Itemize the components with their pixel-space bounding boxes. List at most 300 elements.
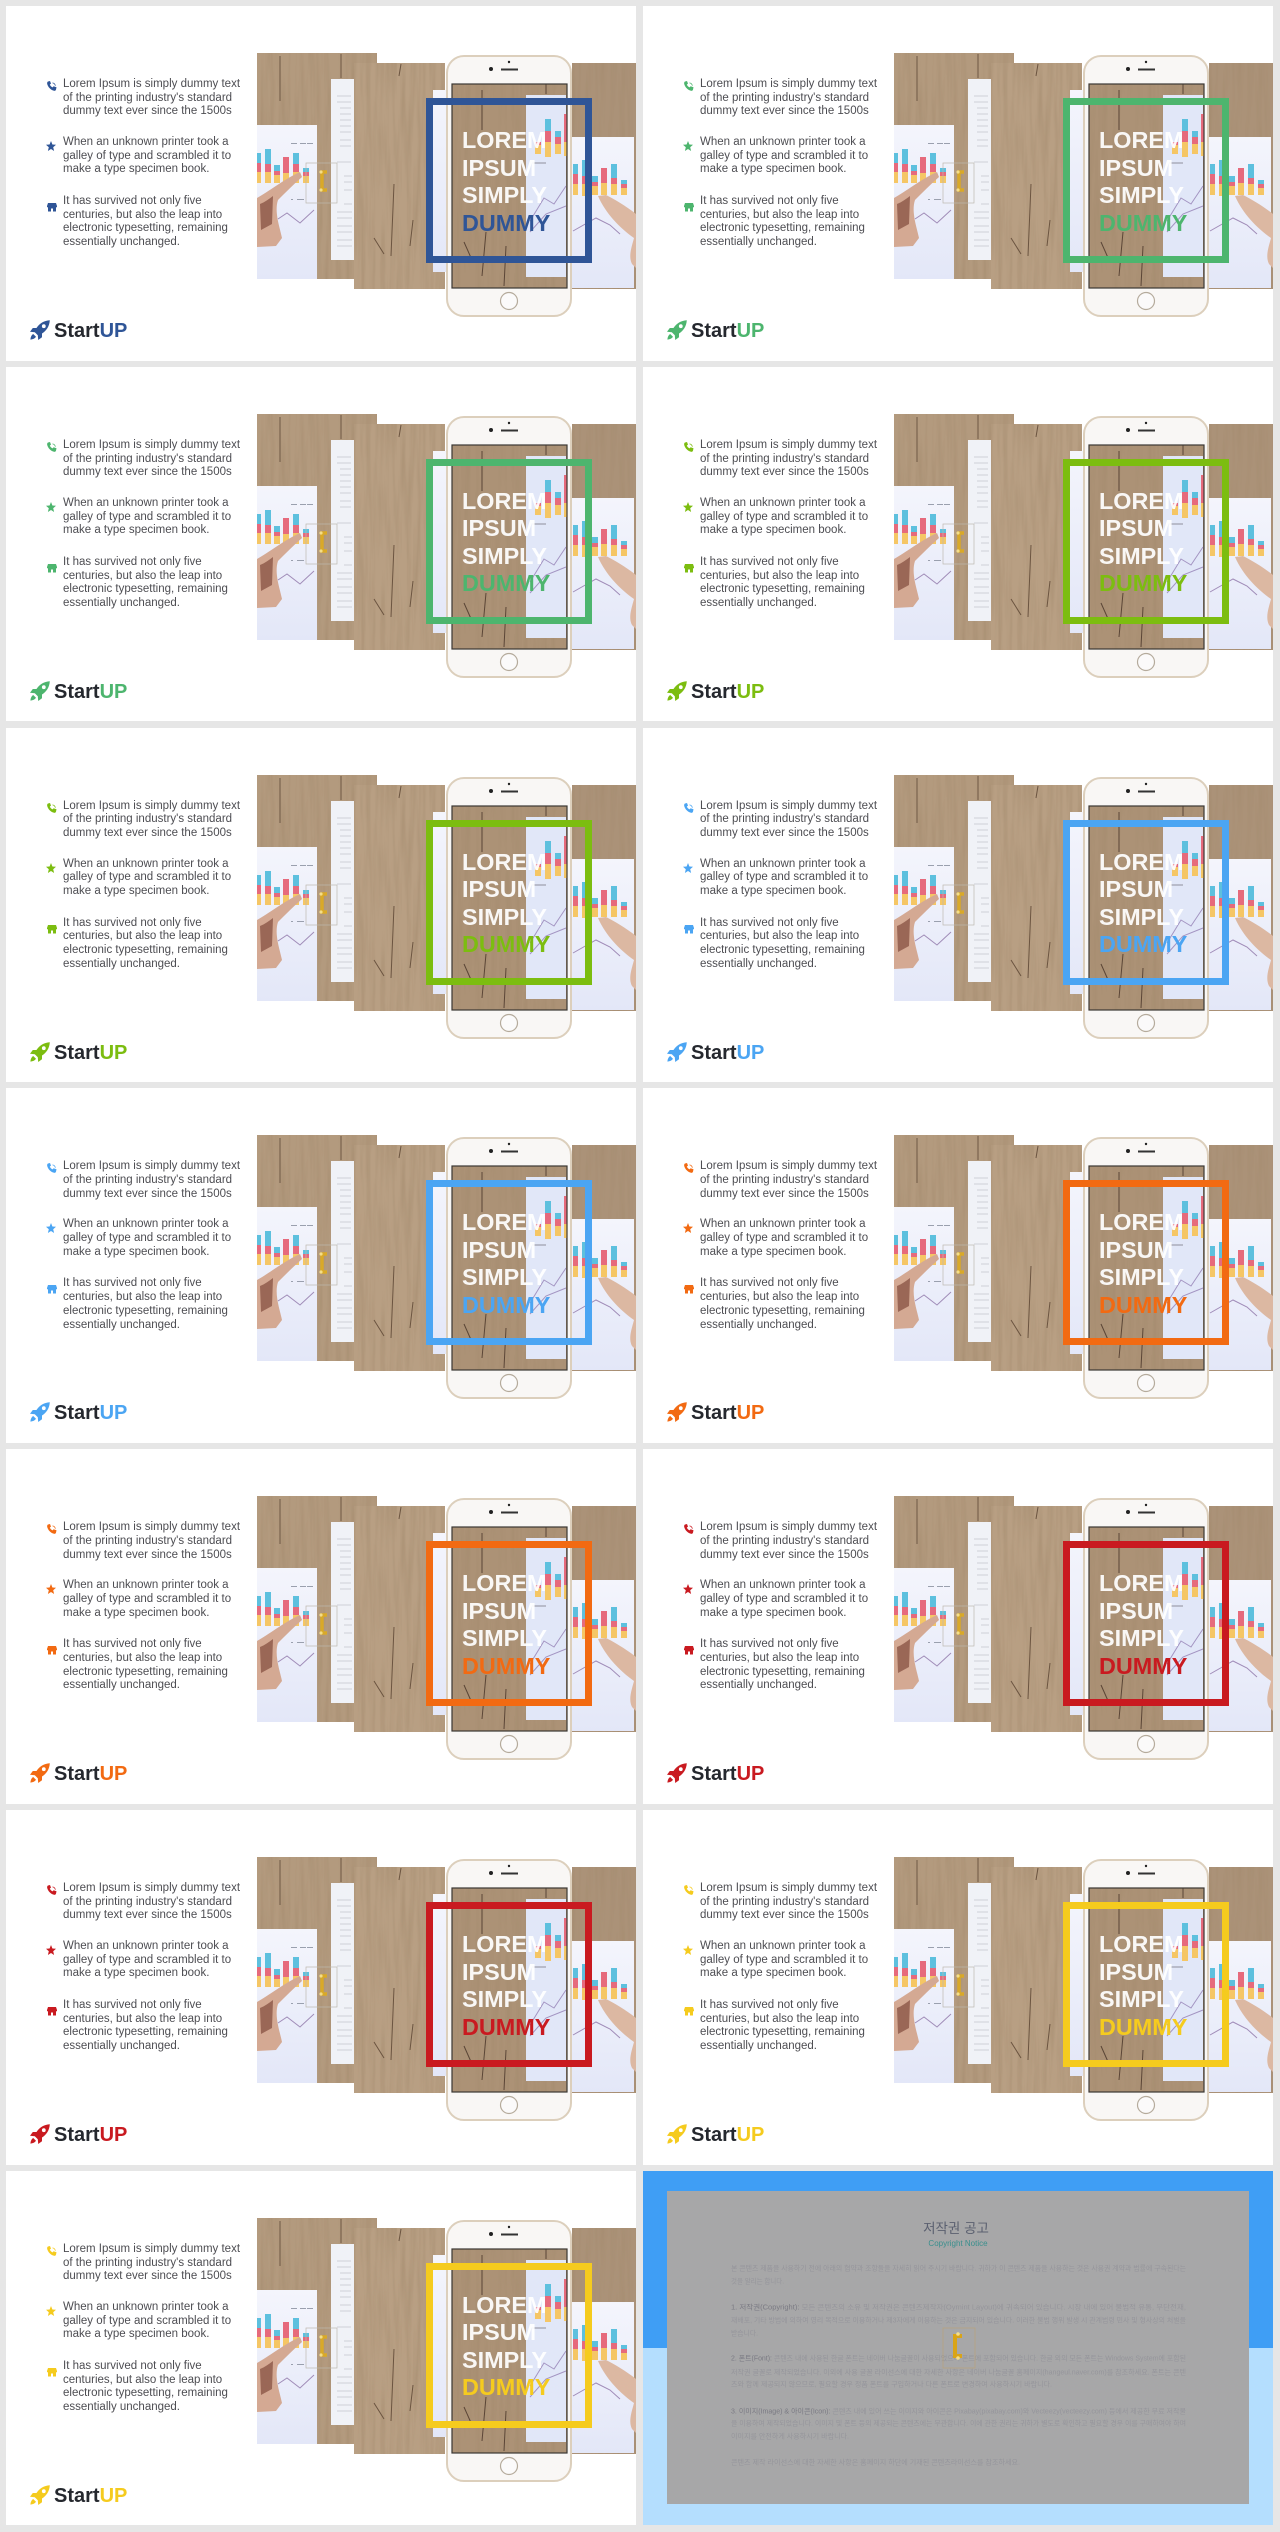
text block 3: electronic typesetting, remaining bbox=[63, 583, 228, 595]
coloured frame bbox=[1063, 459, 1229, 624]
headline: DUMMY bbox=[462, 1653, 550, 1679]
slide 6: sky blue bbox=[643, 728, 1273, 1082]
photo collage with phone bbox=[6, 1088, 636, 1442]
icon: store bbox=[684, 924, 694, 934]
headline: DUMMY bbox=[462, 1292, 550, 1318]
text block 3: electronic typesetting, remaining bbox=[700, 1305, 865, 1317]
text block 2 bbox=[63, 2301, 231, 2342]
notice body text bbox=[731, 2264, 1187, 2466]
icon: star bbox=[683, 502, 693, 512]
text block 2: make a type specimen book. bbox=[63, 1607, 209, 1619]
text block 3: centuries, but also the leap into bbox=[63, 2013, 222, 2025]
text block 1 bbox=[63, 78, 240, 117]
text block 3: It has survived not only five bbox=[63, 195, 202, 207]
icon: store bbox=[47, 1284, 57, 1294]
logo: StartUP: StartUP bbox=[691, 2124, 764, 2146]
photo collage with phone bbox=[6, 1810, 636, 2164]
headline: SIMPLY bbox=[1099, 1986, 1184, 2012]
text block 1: dummy text ever since the 1500s bbox=[63, 2270, 232, 2282]
watermark: gold C bbox=[943, 2328, 975, 2368]
text block 1: dummy text ever since the 1500s bbox=[700, 466, 869, 478]
text block 3: centuries, but also the leap into bbox=[63, 2374, 222, 2386]
logo: StartUP: StartUP bbox=[54, 2124, 127, 2146]
text block 1 bbox=[63, 439, 240, 478]
text block 1: Lorem Ipsum is simply dummy text bbox=[63, 2243, 240, 2255]
text block 2: galley of type and scrambled it to bbox=[700, 1954, 868, 1966]
text block 2: galley of type and scrambled it to bbox=[63, 871, 231, 883]
slide 4: lime bbox=[643, 367, 1273, 721]
headline: SIMPLY bbox=[1099, 182, 1184, 208]
icon: star bbox=[46, 1223, 56, 1233]
notice body text: 본 콘텐츠 제품을 사용하기 전에 아래의 협약과 조항들을 자세히 읽어 주시기 바랍니다. 귀하가 이 콘텐츠 제품을 사용하는 것은 사용권 계약과 법률에 구속된다는 bbox=[731, 2264, 1187, 2272]
headline: SIMPLY bbox=[462, 1264, 547, 1290]
text block 1: of the printing industry's standard bbox=[63, 1535, 232, 1547]
text block 1: Lorem Ipsum is simply dummy text bbox=[700, 78, 877, 90]
icon: phone bbox=[684, 803, 694, 813]
headline: SIMPLY bbox=[462, 2347, 547, 2373]
text block 2: When an unknown printer took a bbox=[63, 1940, 229, 1952]
notice body text: 3. 이미지(Image) & 아이콘(Icon): 콘텐츠 내에 있어 쓰는 이미지와 아이콘은 Pixabay(pixabay.com)와 Vecteezy(vecteezy.com) 등에서 제공한 무료 저작물 bbox=[731, 2406, 1187, 2416]
photo collage with phone bbox=[257, 414, 636, 678]
logo: StartUP: StartUP bbox=[691, 681, 764, 703]
text block 1: of the printing industry's standard bbox=[700, 813, 869, 825]
text block 2: make a type specimen book. bbox=[700, 1246, 846, 1258]
headline bbox=[1099, 1209, 1187, 1319]
text block 3 bbox=[700, 195, 865, 248]
text block 3 bbox=[63, 917, 228, 971]
headline: LOREM bbox=[462, 488, 546, 514]
headline: DUMMY bbox=[1099, 1292, 1187, 1318]
icon: star bbox=[683, 1584, 693, 1594]
text block 3 bbox=[63, 2360, 228, 2415]
text block 2 bbox=[63, 858, 231, 899]
headline: SIMPLY bbox=[1099, 543, 1184, 569]
icon: store bbox=[684, 2006, 694, 2016]
headline: IPSUM bbox=[462, 154, 536, 180]
headline bbox=[462, 127, 550, 236]
text block 3 bbox=[700, 1277, 865, 1332]
background band: light blue bbox=[643, 2348, 1273, 2525]
slide 5: lime bbox=[6, 728, 636, 1082]
text block 3: centuries, but also the leap into bbox=[63, 1291, 222, 1303]
text block 2: make a type specimen book. bbox=[63, 1246, 209, 1258]
icon: star bbox=[46, 141, 56, 151]
text block 1: Lorem Ipsum is simply dummy text bbox=[700, 439, 877, 451]
headline: IPSUM bbox=[1099, 1598, 1173, 1624]
text block 1 bbox=[700, 439, 877, 478]
text block 1: dummy text ever since the 1500s bbox=[63, 1549, 232, 1561]
text block 2: When an unknown printer took a bbox=[700, 497, 866, 509]
text block 3: centuries, but also the leap into bbox=[700, 209, 859, 221]
headline: LOREM bbox=[1099, 1570, 1183, 1596]
notice body text: 것을 알리는 합니다. bbox=[731, 2276, 784, 2286]
headline: LOREM bbox=[462, 1570, 546, 1596]
text block 3: centuries, but also the leap into bbox=[63, 930, 222, 942]
text block 2: galley of type and scrambled it to bbox=[700, 150, 868, 162]
text block 3: essentially unchanged. bbox=[63, 958, 180, 970]
text block 1: Lorem Ipsum is simply dummy text bbox=[63, 1882, 240, 1894]
headline: SIMPLY bbox=[462, 1625, 547, 1651]
text block 2: galley of type and scrambled it to bbox=[700, 871, 868, 883]
icon: star bbox=[683, 1945, 693, 1955]
headline: DUMMY bbox=[1099, 570, 1187, 596]
headline: DUMMY bbox=[1099, 2014, 1187, 2040]
text block 3: essentially unchanged. bbox=[63, 236, 180, 248]
icon: store bbox=[684, 203, 694, 212]
text block 2 bbox=[63, 1579, 231, 1620]
photo collage with phone bbox=[6, 2171, 636, 2525]
text block 3: It has survived not only five bbox=[63, 1999, 202, 2011]
text block 3: essentially unchanged. bbox=[63, 1679, 180, 1691]
headline: SIMPLY bbox=[462, 904, 547, 930]
text block 3 bbox=[700, 917, 865, 971]
slide 1: navy bbox=[6, 6, 636, 360]
icon: store bbox=[47, 2006, 57, 2016]
text block 3 bbox=[700, 1638, 865, 1693]
text block 3: centuries, but also the leap into bbox=[700, 570, 859, 582]
icon: store bbox=[684, 1645, 694, 1655]
text block 1 bbox=[63, 1160, 240, 1202]
text block 1 bbox=[700, 1882, 877, 1923]
text block 3: essentially unchanged. bbox=[700, 1318, 817, 1330]
headline bbox=[1099, 488, 1187, 596]
text block 3: electronic typesetting, remaining bbox=[700, 583, 865, 595]
notice body text: 을 이용하여 제작되었습니다. 이미지 및 폰트 등의 제공되는 콘텐츠에는 무관합니다. 이에 관한 권리는 귀하가 별도로 확인하고 필요할 경우 이를 구매하여야 하며 bbox=[731, 2418, 1186, 2428]
text block 1 bbox=[63, 1882, 240, 1923]
text block 2: When an unknown printer took a bbox=[700, 1940, 866, 1952]
icon: phone bbox=[47, 1163, 57, 1173]
text block 3 bbox=[63, 1277, 228, 1332]
text block 2: make a type specimen book. bbox=[700, 885, 846, 897]
headline: LOREM bbox=[462, 1931, 546, 1957]
text block 1: dummy text ever since the 1500s bbox=[63, 827, 232, 839]
text block 1: dummy text ever since the 1500s bbox=[63, 1909, 232, 1921]
text block 2: When an unknown printer took a bbox=[63, 497, 229, 509]
headline: DUMMY bbox=[462, 210, 550, 236]
headline: DUMMY bbox=[1099, 210, 1187, 236]
text block 1: Lorem Ipsum is simply dummy text bbox=[63, 1160, 240, 1172]
headline: IPSUM bbox=[462, 876, 536, 902]
coloured frame bbox=[1063, 1180, 1229, 1345]
text block 3: essentially unchanged. bbox=[63, 1318, 180, 1330]
headline: SIMPLY bbox=[1099, 1625, 1184, 1651]
notice body text: 콘텐츠 제작 라이선스에 대한 자세한 사항은 홈페이지 하단에 기재된 콘텐츠라이선스를 참조하세요. bbox=[731, 2458, 1020, 2466]
icon: star bbox=[683, 1223, 693, 1233]
text block 2: galley of type and scrambled it to bbox=[63, 1593, 231, 1605]
text block 3: It has survived not only five bbox=[700, 1638, 839, 1650]
text block 3: It has survived not only five bbox=[700, 556, 839, 568]
text block 3: It has survived not only five bbox=[63, 556, 202, 568]
text block 2 bbox=[63, 497, 231, 536]
text block 2 bbox=[700, 1940, 868, 1981]
text block 3: essentially unchanged. bbox=[700, 597, 817, 609]
text block 3: electronic typesetting, remaining bbox=[63, 2026, 228, 2038]
headline bbox=[462, 488, 550, 596]
slide 7: sky blue bbox=[6, 1088, 636, 1443]
background band: blue bbox=[643, 2171, 1273, 2348]
text block 2: galley of type and scrambled it to bbox=[63, 1232, 231, 1244]
icon: store bbox=[47, 203, 57, 212]
icon: phone bbox=[684, 1885, 694, 1895]
headline: IPSUM bbox=[462, 1237, 536, 1263]
text block 3: electronic typesetting, remaining bbox=[700, 222, 865, 234]
text block 3: It has survived not only five bbox=[700, 1277, 839, 1289]
text block 3 bbox=[63, 556, 228, 609]
text block 2: When an unknown printer took a bbox=[63, 1218, 229, 1230]
logo: StartUP: StartUP bbox=[54, 1402, 127, 1424]
icon: store bbox=[47, 924, 57, 934]
coloured frame bbox=[426, 459, 592, 624]
headline: LOREM bbox=[462, 2292, 546, 2318]
slide 14: copyright notice bbox=[643, 2171, 1273, 2525]
notice body text: 츠와 함께 제공되지 않으므로, 필요할 경우 정품 폰트를 구입하거나 다른 폰트로 변경하여 사용하시기 바랍니다. bbox=[731, 2380, 1052, 2388]
text block 2: make a type specimen book. bbox=[63, 163, 209, 175]
coloured frame bbox=[426, 2263, 592, 2428]
text block 2: make a type specimen book. bbox=[700, 163, 846, 175]
headline: DUMMY bbox=[1099, 931, 1187, 957]
text block 2: make a type specimen book. bbox=[63, 1967, 209, 1979]
text block 1: dummy text ever since the 1500s bbox=[700, 1909, 869, 1921]
headline: IPSUM bbox=[1099, 515, 1173, 541]
text block 3: It has survived not only five bbox=[63, 917, 202, 929]
photo collage with phone bbox=[643, 1088, 1273, 1442]
coloured frame bbox=[426, 98, 592, 263]
text block 2: When an unknown printer took a bbox=[63, 858, 229, 870]
text block 1 bbox=[63, 800, 240, 839]
headline: SIMPLY bbox=[462, 543, 547, 569]
text block 3: It has survived not only five bbox=[63, 1277, 202, 1289]
text block 1 bbox=[700, 78, 877, 117]
text block 2 bbox=[700, 858, 868, 899]
text block 2: make a type specimen book. bbox=[700, 524, 846, 536]
slide 11: red bbox=[6, 1810, 636, 2164]
headline bbox=[462, 849, 550, 959]
headline: DUMMY bbox=[462, 570, 550, 596]
icon: star bbox=[683, 863, 693, 873]
slide 8: orange bbox=[643, 1088, 1273, 1443]
text block 3: centuries, but also the leap into bbox=[63, 1652, 222, 1664]
icon: star bbox=[683, 141, 693, 151]
text block 2 bbox=[63, 1940, 231, 1981]
text block 1: dummy text ever since the 1500s bbox=[63, 466, 232, 478]
text block 2: make a type specimen book. bbox=[700, 1967, 846, 1979]
notice body text: 이미지를 안전하게 사용하시기 바랍니다. bbox=[731, 2432, 849, 2440]
text block 3 bbox=[700, 1999, 865, 2054]
text block 3: It has survived not only five bbox=[700, 195, 839, 207]
coloured frame bbox=[1063, 820, 1229, 985]
text block 2: galley of type and scrambled it to bbox=[700, 510, 868, 522]
headline: IPSUM bbox=[1099, 1958, 1173, 1984]
text block 3: centuries, but also the leap into bbox=[63, 570, 222, 582]
text block 2: galley of type and scrambled it to bbox=[63, 1954, 231, 1966]
text block 2 bbox=[700, 1579, 868, 1620]
coloured frame bbox=[426, 820, 592, 985]
notice body text: 저작권 글꼴로 제작되었습니다. 이외에 사용 글꼴 라이선스에 대한 자세한 사항은 네이버 나눔글꼴 홈페이지(hangeul.naver.com)를 참조하세요. 폰트는 콘텐 bbox=[731, 2368, 1186, 2376]
notice body text: 재배포, 기타 방법에 의하여 영리 목적으로 이용하거나 제3자에게 이용하는 것은 금지되어 있습니다. 이러한 불법 행위 발생 시 관계법령 민사 및 형사상의 처벌을 bbox=[731, 2316, 1187, 2324]
headline: LOREM bbox=[1099, 1209, 1183, 1235]
text block 3: electronic typesetting, remaining bbox=[63, 944, 228, 956]
text block 3: essentially unchanged. bbox=[700, 1679, 817, 1691]
text block 1: dummy text ever since the 1500s bbox=[63, 105, 232, 117]
text block 3: It has survived not only five bbox=[700, 917, 839, 929]
text block 3: It has survived not only five bbox=[63, 2360, 202, 2372]
logo: StartUP: StartUP bbox=[54, 2485, 127, 2507]
icon: star bbox=[46, 502, 56, 512]
logo: StartUP: StartUP bbox=[691, 1402, 764, 1424]
text block 3: essentially unchanged. bbox=[63, 2040, 180, 2052]
headline: IPSUM bbox=[462, 515, 536, 541]
coloured frame bbox=[426, 1180, 592, 1345]
coloured frame bbox=[1063, 1902, 1229, 2067]
coloured frame bbox=[1063, 98, 1229, 263]
headline: DUMMY bbox=[1099, 1653, 1187, 1679]
text block 3: essentially unchanged. bbox=[63, 2401, 180, 2413]
headline: SIMPLY bbox=[462, 1986, 547, 2012]
text block 3: centuries, but also the leap into bbox=[63, 209, 222, 221]
notice body text: 받습니다. bbox=[731, 2328, 758, 2338]
text block 1: Lorem Ipsum is simply dummy text bbox=[700, 1521, 877, 1533]
text block 3: It has survived not only five bbox=[63, 1638, 202, 1650]
slide 13: yellow bbox=[6, 2171, 636, 2525]
text block 2 bbox=[700, 497, 868, 536]
icon: star bbox=[46, 1945, 56, 1955]
icon: star bbox=[46, 863, 56, 873]
notice subtitle: Copyright Notice bbox=[928, 2239, 988, 2248]
slide 10: red bbox=[643, 1449, 1273, 1804]
text block 3 bbox=[63, 1999, 228, 2054]
text block 3: It has survived not only five bbox=[700, 1999, 839, 2011]
photo collage with phone bbox=[643, 1449, 1273, 1803]
text block 2: galley of type and scrambled it to bbox=[700, 1593, 868, 1605]
headline: DUMMY bbox=[462, 2374, 550, 2400]
headline bbox=[462, 1570, 550, 1680]
text block 2: make a type specimen book. bbox=[63, 885, 209, 897]
notice body text: 2. 폰트(Font): 콘텐츠 내에 사용된 한글 폰트는 네이버 나눔글꼴이 사용되었으며 폰트에 포함되어 있습니다. 한글 외의 모든 폰트는 Windows System에 포함된 bbox=[731, 2354, 1186, 2362]
slide 9: orange bbox=[6, 1449, 636, 1804]
text block 1: dummy text ever since the 1500s bbox=[700, 827, 869, 839]
photo collage with phone bbox=[643, 728, 1273, 1082]
headline: SIMPLY bbox=[1099, 1264, 1184, 1290]
headline: IPSUM bbox=[462, 1958, 536, 1984]
icon: phone bbox=[684, 1163, 694, 1173]
text block 3 bbox=[63, 1638, 228, 1693]
text block 3: electronic typesetting, remaining bbox=[700, 944, 865, 956]
text block 1: of the printing industry's standard bbox=[63, 92, 232, 104]
headline: IPSUM bbox=[462, 1598, 536, 1624]
icon: store bbox=[47, 1645, 57, 1655]
icon: store bbox=[47, 2367, 57, 2377]
text block 3: electronic typesetting, remaining bbox=[63, 1305, 228, 1317]
text block 1: Lorem Ipsum is simply dummy text bbox=[700, 800, 877, 812]
text block 3: centuries, but also the leap into bbox=[700, 930, 859, 942]
text block 1: dummy text ever since the 1500s bbox=[63, 1188, 232, 1200]
slide 2: green bbox=[643, 6, 1273, 360]
photo collage with phone bbox=[894, 53, 1273, 317]
text block 3: electronic typesetting, remaining bbox=[63, 1666, 228, 1678]
headline: DUMMY bbox=[462, 2014, 550, 2040]
text block 2: make a type specimen book. bbox=[63, 524, 209, 536]
icon: store bbox=[684, 1284, 694, 1294]
grey notice panel bbox=[667, 2191, 1249, 2504]
photo collage with phone bbox=[894, 414, 1273, 678]
headline bbox=[1099, 849, 1187, 959]
headline bbox=[462, 1209, 550, 1319]
text block 3: essentially unchanged. bbox=[700, 2040, 817, 2052]
text block 3: electronic typesetting, remaining bbox=[63, 222, 228, 234]
headline: LOREM bbox=[462, 127, 546, 153]
headline bbox=[1099, 127, 1187, 236]
headline: LOREM bbox=[1099, 127, 1183, 153]
text block 2: galley of type and scrambled it to bbox=[63, 150, 231, 162]
headline: IPSUM bbox=[1099, 1237, 1173, 1263]
icon: phone bbox=[684, 442, 694, 452]
headline bbox=[462, 2292, 550, 2402]
text block 2: make a type specimen book. bbox=[63, 2328, 209, 2340]
logo: StartUP: StartUP bbox=[54, 320, 127, 342]
icon: phone bbox=[47, 1524, 57, 1534]
text block 1: dummy text ever since the 1500s bbox=[700, 105, 869, 117]
coloured frame bbox=[426, 1902, 592, 2067]
logo: StartUP: StartUP bbox=[54, 1042, 127, 1064]
text block 3: electronic typesetting, remaining bbox=[700, 2026, 865, 2038]
headline: LOREM bbox=[1099, 849, 1183, 875]
headline: IPSUM bbox=[1099, 876, 1173, 902]
icon: store bbox=[684, 564, 694, 572]
text block 3: centuries, but also the leap into bbox=[700, 1652, 859, 1664]
text block 1: of the printing industry's standard bbox=[700, 452, 869, 464]
text block 2: When an unknown printer took a bbox=[700, 858, 866, 870]
text block 1: of the printing industry's standard bbox=[63, 1174, 232, 1186]
headline: LOREM bbox=[462, 1209, 546, 1235]
text block 1: Lorem Ipsum is simply dummy text bbox=[63, 78, 240, 90]
text block 1: Lorem Ipsum is simply dummy text bbox=[63, 1521, 240, 1533]
text block 1: of the printing industry's standard bbox=[700, 1896, 869, 1908]
text block 1: of the printing industry's standard bbox=[700, 1535, 869, 1547]
text block 1: of the printing industry's standard bbox=[63, 1896, 232, 1908]
icon: star bbox=[46, 2306, 56, 2316]
coloured frame bbox=[426, 1541, 592, 1706]
text block 2: When an unknown printer took a bbox=[63, 2301, 229, 2313]
text block 2: galley of type and scrambled it to bbox=[63, 510, 231, 522]
notice body text: 1. 저작권(Copyright): 모든 콘텐츠의 소유 및 저작권은 콘텐츠제작자(Oymint Layout)에 귀속되어 있습니다. 시장 내에 있어 불법적 유통, 무단전재, bbox=[731, 2302, 1186, 2312]
text block 2: When an unknown printer took a bbox=[63, 136, 229, 148]
text block 1: of the printing industry's standard bbox=[63, 2256, 232, 2268]
text block 1: of the printing industry's standard bbox=[63, 452, 232, 464]
slide 3: green bbox=[6, 367, 636, 721]
logo: StartUP: StartUP bbox=[691, 1042, 764, 1064]
headline bbox=[1099, 1931, 1187, 2041]
icon: phone bbox=[47, 442, 56, 452]
text block 1: of the printing industry's standard bbox=[700, 1174, 869, 1186]
icon: phone bbox=[684, 81, 694, 91]
photo collage with phone bbox=[257, 775, 636, 1039]
text block 1 bbox=[700, 1521, 877, 1562]
logo: StartUP: StartUP bbox=[691, 1763, 764, 1785]
headline: SIMPLY bbox=[462, 182, 547, 208]
icon: phone bbox=[47, 2246, 57, 2256]
text block 1: Lorem Ipsum is simply dummy text bbox=[700, 1160, 877, 1172]
text block 3: essentially unchanged. bbox=[700, 958, 817, 970]
text block 1: of the printing industry's standard bbox=[700, 92, 869, 104]
headline: SIMPLY bbox=[1099, 904, 1184, 930]
headline: LOREM bbox=[1099, 488, 1183, 514]
text block 2: galley of type and scrambled it to bbox=[700, 1232, 868, 1244]
text block 3: electronic typesetting, remaining bbox=[700, 1666, 865, 1678]
slide 12: yellow bbox=[643, 1810, 1273, 2164]
icon: store bbox=[47, 564, 57, 572]
icon: phone bbox=[684, 1524, 694, 1534]
logo: StartUP: StartUP bbox=[691, 320, 764, 342]
